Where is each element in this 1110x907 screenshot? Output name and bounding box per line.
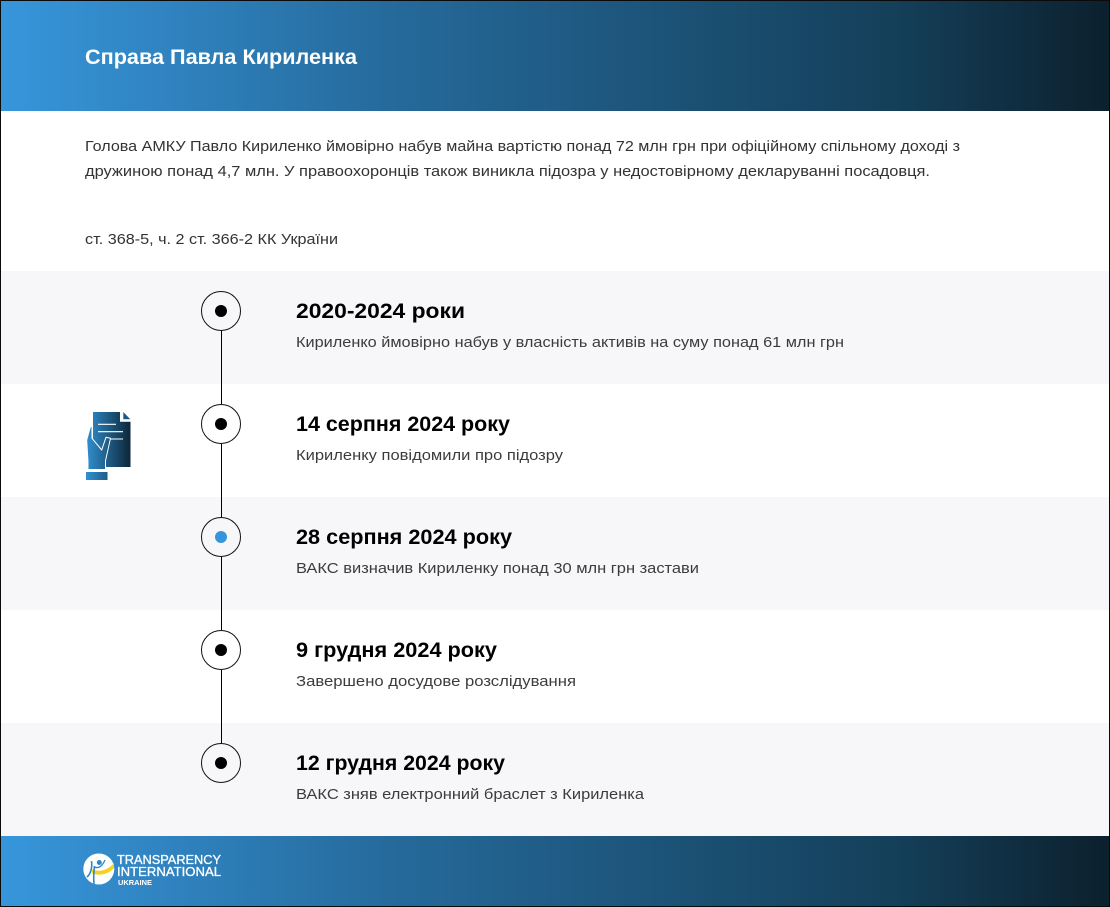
timeline event: 2020-2024 (202, 292, 844, 351)
icon: hand holding document (86, 412, 130, 480)
timeline event: 9 December: Завершено досудове розслідування (296, 673, 576, 690)
logo: Transparency International Ukraine: TRANSPARENCY (117, 853, 222, 867)
timeline event: 14 August: Кириленку повідомили про підозру (296, 447, 564, 464)
timeline panel (0, 271, 1110, 836)
intro text: дружиною понад 4,7 млн. У правоохоронців також виникла підозра у недостовірному декларуванні посадовця. (85, 163, 930, 180)
header banner (0, 0, 1110, 111)
title: Справа Павла Кириленка (85, 46, 357, 69)
timeline event: 12 December (202, 744, 645, 803)
timeline event: 28 August: 28 серпня 2024 року (296, 526, 512, 549)
intro text (85, 138, 960, 180)
logo: Transparency International Ukraine: UKRAINE (118, 878, 152, 887)
logo: Transparency International Ukraine: INTERNATIONAL (117, 865, 221, 879)
timeline event: 9 December (202, 630, 576, 690)
timeline event: 9 December: 9 грудня 2024 року (296, 639, 497, 662)
timeline event: 14 August (202, 404, 564, 464)
logo: Transparency International Ukraine (83, 853, 222, 887)
timeline event: 12 December: 12 грудня 2024 року (296, 752, 505, 775)
timeline event: 14 August: 14 серпня 2024 року (296, 413, 510, 436)
timeline event: 2020-2024: Кириленко ймовірно набув у власність активів на суму понад 61 млн грн (296, 334, 844, 351)
timeline event: 28 August (202, 518, 699, 577)
intro text: Голова АМКУ Павло Кириленко ймовірно набув майна вартістю понад 72 млн грн при офіційному спільному доході з (85, 138, 960, 155)
timeline event: 2020-2024: 2020-2024 роки (296, 300, 465, 323)
timeline event: 28 August: ВАКС визначив Кириленку понад 30 млн грн застави (296, 560, 699, 577)
timeline event: 12 December: ВАКС зняв електронний браслет з Кириленка (296, 786, 645, 803)
footer banner (0, 836, 1110, 906)
legal citation: ст. 368-5, ч. 2 ст. 366-2 КК України (85, 231, 338, 248)
